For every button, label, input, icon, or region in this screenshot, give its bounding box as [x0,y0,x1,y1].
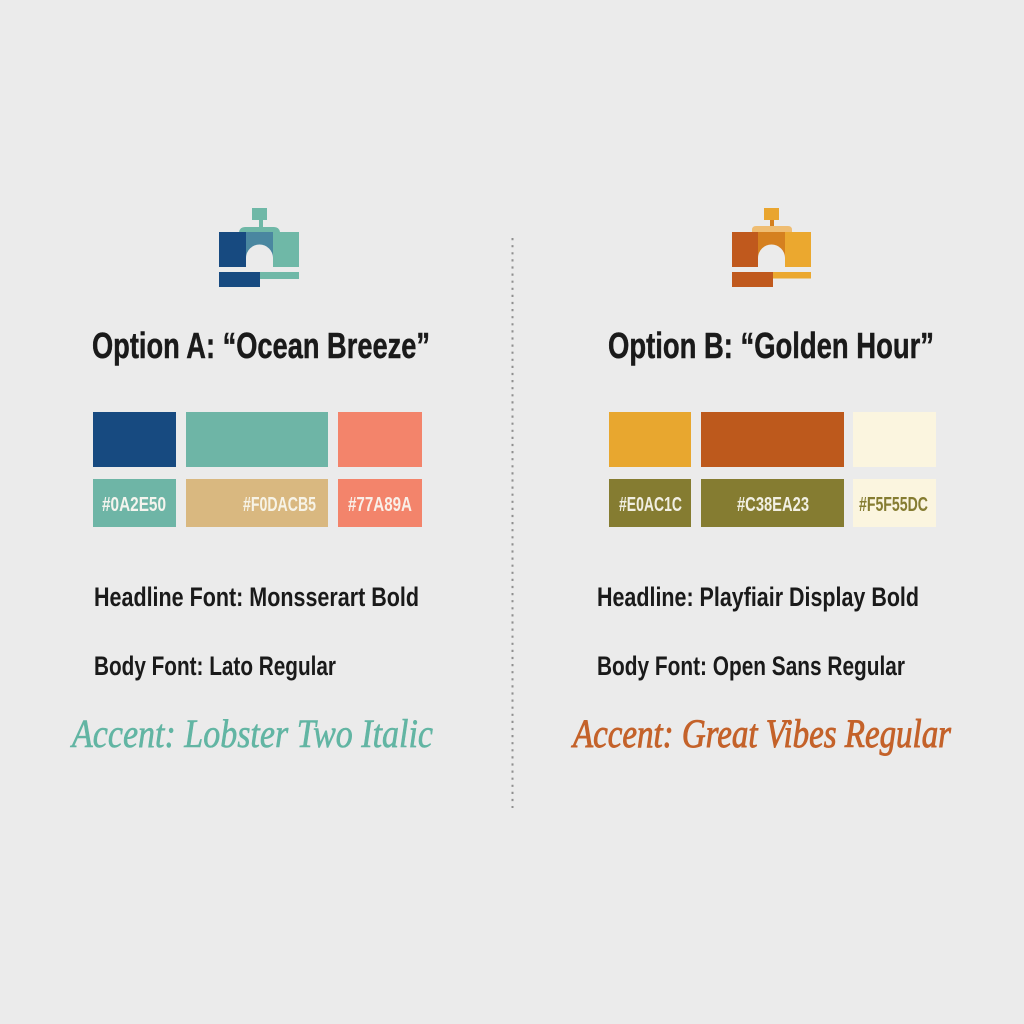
icon: ocean breeze logo [219,208,299,287]
swatches: top row A [93,412,422,467]
swatch: #E0AC1C: #E0AC1C [619,494,682,516]
swatch: #F5F55DC [853,479,936,527]
text: headline font B: Headline: Playfiair Display Bold [597,582,919,612]
swatch: #C38EA23 [701,479,844,527]
swatches: top row B [609,412,936,467]
icon: golden hour logo [732,208,811,287]
swatch: #0A2E50 [93,479,176,527]
text: headline font A: Headline Font: Monsserart Bold [94,582,419,612]
swatch: #77A89A [338,479,422,527]
swatch: #F0DACB5: #F0DACB5 [243,494,316,516]
swatch: #F5F55DC: #F5F55DC [859,494,928,516]
panel: option B [571,208,951,756]
text: body font B: Body Font: Open Sans Regular [597,651,905,681]
heading: option B: Option B: “Golden Hour” [608,325,934,366]
text: accent B: Accent: Great Vibes Regular [571,711,951,756]
text: body font A: Body Font: Lato Regular [94,651,336,681]
swatch: #0A2E50: #0A2E50 [102,494,166,516]
swatch: #F0DACB5 [186,479,328,527]
heading: option A: Option A: “Ocean Breeze” [92,325,430,366]
panel: option A [69,208,433,756]
text: accent A: Accent: Lobster Two Italic [69,711,433,756]
swatch: #E0AC1C [609,479,691,527]
swatch: #C38EA23: #C38EA23 [737,494,809,516]
swatch: #77A89A: #77A89A [348,494,412,516]
divider between options [512,238,514,808]
